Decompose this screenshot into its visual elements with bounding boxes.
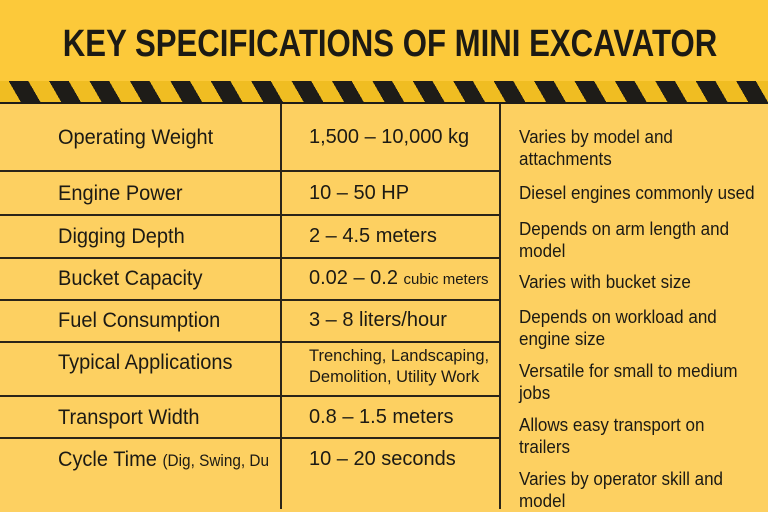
column: notes: jobs [519, 382, 550, 403]
column: notes: Depends on arm length and [519, 218, 729, 239]
column: parameters: Transport Width [58, 405, 199, 429]
column: parameters: Bucket Capacity [58, 266, 202, 290]
column: parameters: Operating Weight [58, 125, 213, 149]
column: parameters: Fuel Consumption [58, 308, 220, 332]
column: parameters: Cycle Time (Dig, Swing, Du [58, 447, 269, 471]
column: values: 0.8 – 1.5 meters [309, 406, 454, 428]
column: values: 0.02 – 0.2 cubic meters [309, 267, 489, 289]
title band [0, 0, 768, 81]
column: values: 10 – 50 HP [309, 182, 409, 204]
column: values: Trenching, Landscaping, [309, 347, 489, 365]
column: notes: model [519, 240, 565, 261]
column: notes: Depends on workload and [519, 306, 717, 327]
column: notes: model [519, 490, 565, 511]
column: values: 2 – 4.5 meters [309, 225, 437, 247]
title: KEY SPECIFICATIONS OF MINI EXCAVATOR [63, 23, 717, 65]
column: values: 10 – 20 seconds [309, 448, 456, 470]
column: parameters: Digging Depth [58, 224, 185, 248]
column: notes: Varies with bucket size [519, 271, 691, 292]
column: values: 1,500 – 10,000 kg [309, 126, 469, 148]
hazard stripe band [0, 81, 768, 104]
column: notes: trailers [519, 436, 570, 457]
column: parameters [58, 125, 269, 471]
column: notes: Versatile for small to medium [519, 360, 738, 381]
column: parameters: Typical Applications [58, 350, 233, 374]
column: values: 3 – 8 liters/hour [309, 309, 447, 331]
column: notes: engine size [519, 328, 605, 349]
column: values [309, 126, 489, 470]
column: values: Demolition, Utility Work [309, 368, 479, 386]
table [0, 104, 755, 511]
column: notes: Allows easy transport on [519, 414, 704, 435]
column: parameters: Engine Power [58, 181, 183, 205]
column: notes: Varies by operator skill and [519, 468, 723, 489]
column: notes: Varies by model and [519, 126, 673, 147]
column: notes: attachments [519, 148, 612, 169]
column: notes [518, 126, 755, 511]
column: notes: Diesel engines commonly used [519, 182, 755, 203]
